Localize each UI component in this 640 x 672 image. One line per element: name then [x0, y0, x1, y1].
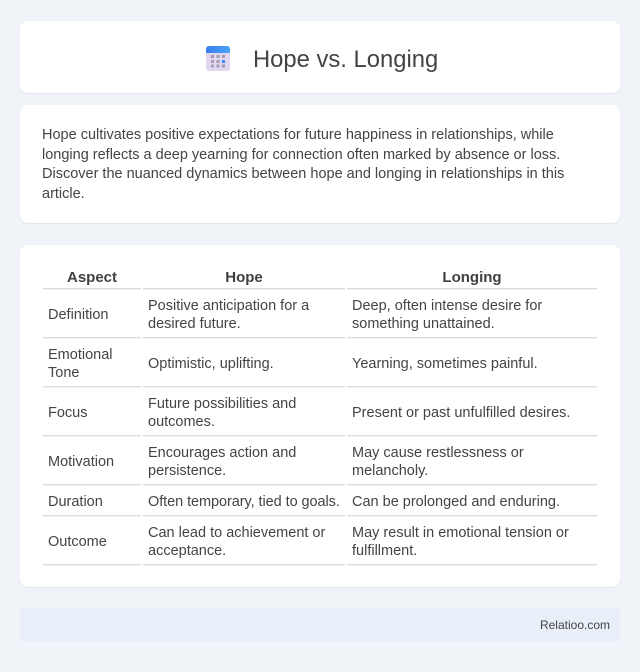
- text block: intro: article.: [42, 186, 85, 202]
- footer text: Relatioo.com: [540, 618, 610, 632]
- text block: intro: [42, 127, 564, 202]
- header: Hope: Hope: [225, 269, 263, 286]
- footer bar: [20, 608, 620, 642]
- panel: introduction: [20, 105, 620, 223]
- row: Outcome: Can lead to achievement or: [148, 525, 325, 541]
- row: Motivation: persistence.: [148, 463, 226, 479]
- title: Hope vs. Longing: [253, 46, 438, 73]
- row: Focus: Future possibilities and: [148, 396, 296, 412]
- row: Duration: Often temporary, tied to goals.: [148, 494, 340, 510]
- row: Motivation: Motivation: [48, 454, 114, 470]
- row: Definition: something unattained.: [352, 316, 495, 332]
- row: Outcome: May result in emotional tension or: [352, 525, 569, 541]
- row: Focus: outcomes.: [148, 414, 215, 430]
- row: Definition: [48, 298, 542, 332]
- row: Motivation: melancholy.: [352, 463, 428, 479]
- row: Outcome: fulfillment.: [352, 543, 417, 559]
- row: Motivation: May cause restlessness or: [352, 445, 524, 461]
- text block: intro: Hope cultivates positive expectations for future happiness in relationships, while: [42, 127, 554, 143]
- row: Definition: Deep, often intense desire for: [352, 298, 542, 314]
- header: Aspect: Aspect: [67, 269, 117, 286]
- row: Outcome: Outcome: [48, 534, 107, 550]
- row: Focus: Focus: [48, 405, 88, 421]
- row: Outcome: [48, 525, 569, 559]
- row: Duration: [48, 494, 560, 510]
- row: Duration: Duration: [48, 494, 103, 510]
- row: Outcome: acceptance.: [148, 543, 226, 559]
- row: Emotional Tone: Optimistic, uplifting.: [148, 356, 274, 372]
- text block: intro: Discover the nuanced dynamics between hope and longing in relationships in this: [42, 166, 564, 182]
- row: Motivation: [48, 445, 524, 479]
- row: Emotional Tone: [48, 347, 538, 381]
- table: [43, 269, 597, 566]
- text block: intro: longing reflects a deep yearning for connection often marked by absence or loss.: [42, 147, 560, 163]
- row: Focus: Present or past unfulfilled desires.: [352, 405, 570, 421]
- icon: calendar: [206, 46, 230, 71]
- row: Duration: Can be prolonged and enduring.: [352, 494, 560, 510]
- row: Focus: [48, 396, 570, 430]
- row: Emotional Tone: Yearning, sometimes painful.: [352, 356, 538, 372]
- row: Definition: Positive anticipation for a: [148, 298, 309, 314]
- row: Emotional Tone: Tone: [48, 365, 79, 381]
- row: Definition: Definition: [48, 307, 108, 323]
- row: Emotional Tone: Emotional: [48, 347, 112, 363]
- panel: title card: [20, 21, 620, 93]
- row: Motivation: Encourages action and: [148, 445, 296, 461]
- panel: comparison table: [20, 245, 620, 587]
- row: Definition: desired future.: [148, 316, 241, 332]
- header: Longing: Longing: [442, 269, 502, 286]
